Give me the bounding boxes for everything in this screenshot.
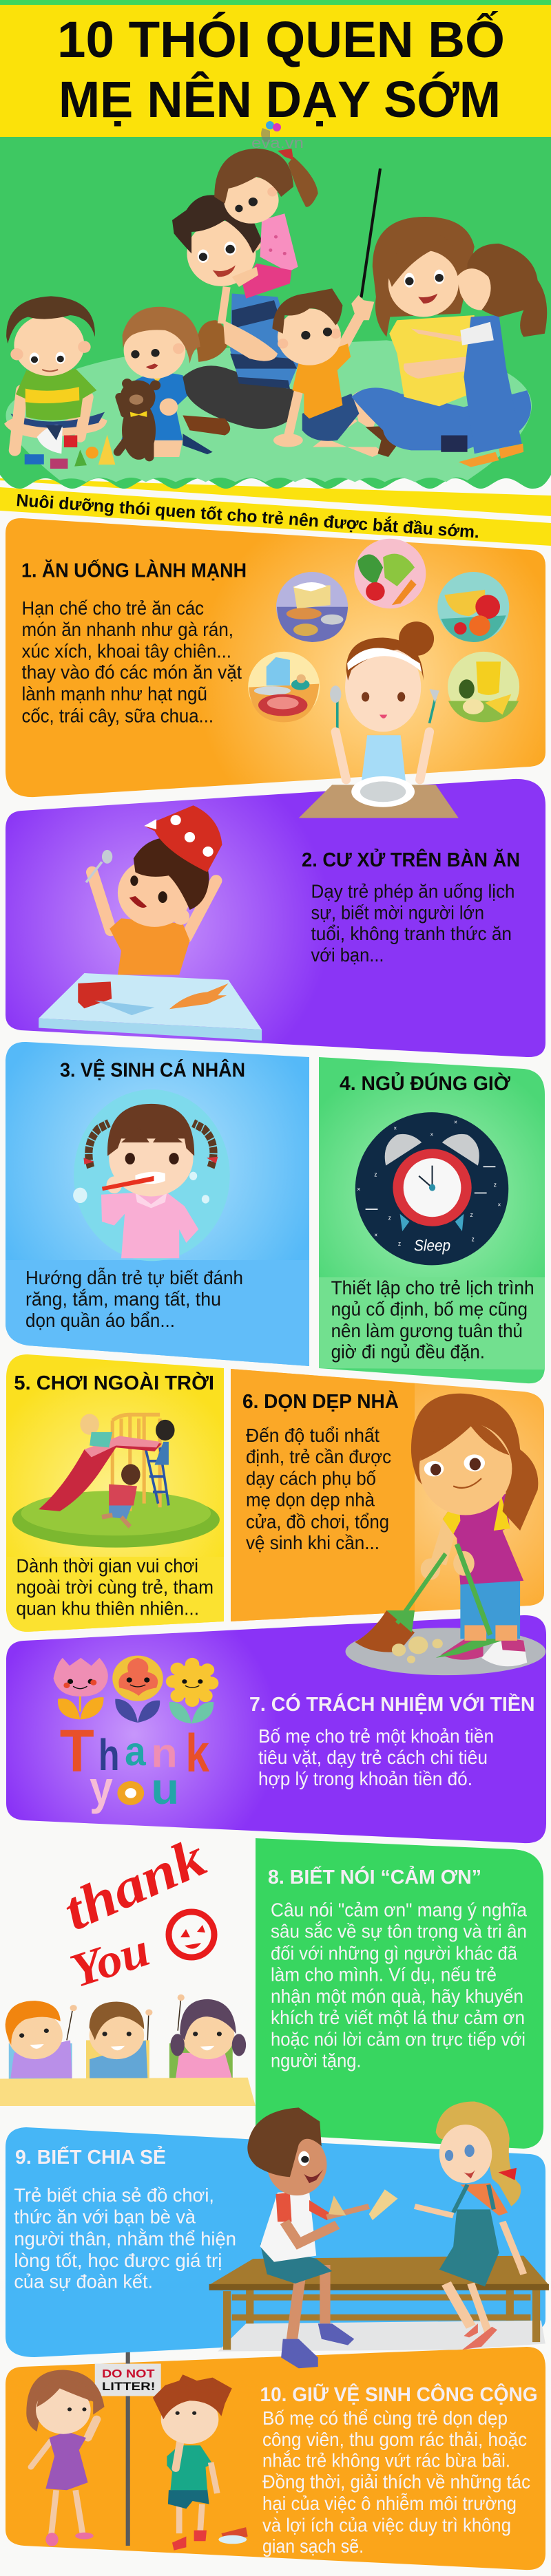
text: healthy eating: thay vào đó các món ăn vặt (22, 661, 242, 683)
panel 8: saying thank you (0, 1827, 543, 2149)
illustration: flowers and thank you letters: k (185, 1723, 209, 1783)
text: table manners: Dạy trẻ phép ăn uống lịch (311, 881, 515, 902)
toy blocks (25, 435, 115, 469)
illustration: flowers and thank you letters: T (60, 1718, 94, 1785)
text: saying thank you: khích trẻ viết một lá thư cảm ơn (271, 2007, 525, 2028)
panel 10: public hygiene (6, 2341, 545, 2570)
boy with orange shirt (272, 288, 401, 457)
text: saying thank you: hoặc nói lời cảm ơn trực tiếp với (271, 2028, 526, 2050)
illustration: girl brushing teeth (73, 1089, 230, 1261)
panel 7: responsibility with money (6, 1615, 546, 1843)
sandwiches (329, 2189, 398, 2220)
subtitle band: Nuôi dưỡng thói quen tốt cho trẻ nên được bắt đầu sớm. (16, 489, 480, 542)
heading: personal hygiene: 3. VỆ SINH CÁ NHÂN (60, 1058, 245, 1082)
illustration: flowers and thank you letters: u (151, 1764, 179, 1813)
text: sharing: người thân, nhằm thể hiện (14, 2228, 236, 2249)
heading: public hygiene: 10. GIỮ VỆ SINH CÔNG CỘNG (260, 2383, 537, 2406)
text: saying thank you: nhận một món quà, hãy khuyến (271, 1986, 523, 2007)
heading: sleep on time: 4. NGỦ ĐÚNG GIỜ (340, 1072, 510, 1095)
text: cleaning the house: cửa, đồ chơi, tổng (246, 1511, 389, 1533)
text: saying thank you: sâu sắc về sự tôn trọng và tri ân (271, 1921, 527, 1942)
heading: cleaning the house: 6. DỌN DẸP NHÀ (242, 1390, 399, 1413)
text: outdoor play (17, 1555, 214, 1619)
text: cleaning the house: định, trẻ cần được (246, 1446, 391, 1467)
girl kissing mother (457, 244, 547, 467)
text: sharing: của sự đoàn kết. (14, 2271, 153, 2292)
text: table manners: tuổi, không tranh thức ăn (311, 923, 512, 944)
girl in purple dress (26, 2370, 105, 2546)
text: cleaning the house: mẹ dọn dẹp nhà (246, 1489, 375, 1511)
panel 1: healthy eating (6, 518, 545, 818)
text: responsibility with money (258, 1725, 494, 1789)
illustration: red thank you lettering: You (64, 1923, 156, 1998)
text: healthy eating: Hạn chế cho trẻ ăn các (22, 597, 204, 619)
text: responsibility with money: Bố mẹ cho trẻ một khoản tiền (258, 1725, 494, 1747)
teddy bear (118, 379, 160, 460)
text: cleaning the house: Đến độ tuổi nhất (246, 1425, 380, 1446)
illustration: flowers and thank you letters: h (98, 1730, 119, 1780)
panel 9: sharing (6, 2101, 549, 2368)
panel 3: personal hygiene (6, 1042, 309, 1366)
illustration: alarm clock: × (454, 1118, 457, 1126)
text: table manners: với bạn... (311, 944, 384, 966)
text: public hygiene: và lợi ích của việc duy trì không (262, 2514, 511, 2535)
illustration: playground with kids (12, 1414, 220, 1548)
text: sharing: thức ăn với bạn bè và (14, 2206, 196, 2227)
text: sleep on time: ngủ cố định, bố mẹ cũng (331, 1298, 528, 1319)
text: sleep on time: nên làm gương tuân thủ (331, 1320, 523, 1341)
text: public hygiene: Đồng thời, giải thích về những tác (262, 2471, 530, 2493)
illustration: red thank you lettering: thank (55, 1827, 215, 1942)
panel 2: table manners (6, 779, 545, 1057)
girl on father's shoulders (214, 149, 318, 299)
text: cleaning the house: vệ sinh khi cần... (246, 1532, 380, 1553)
title banner (0, 0, 551, 138)
text: sharing (14, 2184, 236, 2292)
girl (415, 2101, 523, 2350)
illustration: alarm clock: z (374, 1171, 377, 1178)
illustration: alarm clock: × (430, 1131, 433, 1138)
text: outdoor play: quan khu thiên nhiên... (17, 1597, 199, 1619)
illustration: alarm clock: z (388, 1214, 391, 1222)
illustration: flowers and thank you letters (54, 1656, 218, 1814)
father (172, 195, 299, 436)
illustration: girl sweeping (346, 1394, 545, 1675)
illustration: three children at a desk (0, 1994, 256, 2106)
eva.vn logo: eva.vn (251, 134, 304, 151)
sign: do not litter (95, 2364, 161, 2396)
illustration: alarm clock: Sleep (414, 1237, 450, 1255)
illustration: alarm clock: z (472, 1235, 475, 1243)
text: saying thank you: Câu nói "cảm ơn" mang ý nghĩa (271, 1899, 528, 1920)
text: public hygiene: công viên, thu gom rác thải, hoặc (262, 2429, 527, 2450)
text: saying thank you (271, 1899, 528, 2072)
text: sleep on time (331, 1277, 534, 1363)
boy (247, 2107, 369, 2368)
text: healthy eating (22, 597, 242, 726)
illustration: alarm clock: z (398, 1239, 401, 1247)
text: sleep on time: giờ đi ngủ đều đặn. (331, 1341, 485, 1363)
text: healthy eating: lành mạnh như hạt ngũ (22, 683, 207, 705)
illustration: flowers and thank you letters: y (90, 1762, 113, 1814)
illustration: alarm clock: × (374, 1231, 377, 1239)
text: public hygiene: gian sạch sẽ. (262, 2535, 364, 2557)
text: sharing: Trẻ biết chia sẻ đồ chơi, (14, 2184, 214, 2206)
text: saying thank you: đối với những gì người khác đã (271, 1942, 518, 1963)
text: table manners (311, 881, 515, 966)
heading: sharing: 9. BIẾT CHIA SẺ (15, 2145, 166, 2169)
heading: table manners: 2. CƯ XỬ TRÊN BÀN ĂN (302, 848, 520, 871)
text: personal hygiene: Hướng dẫn trẻ tự biết đánh (25, 1267, 243, 1288)
panel 5: outdoor play (6, 1354, 224, 1632)
text: outdoor play: ngoài trời cùng trẻ, tham (17, 1576, 214, 1597)
illustration: alarm clock (355, 1112, 508, 1265)
text: responsibility with money: hợp lý trong khoản tiền đó. (258, 1768, 472, 1789)
title banner: MẸ NÊN DẠY SỚM (59, 71, 501, 128)
text: public hygiene: hại của việc ô nhiễm môi trường (262, 2493, 517, 2514)
text: public hygiene: nhắc trẻ không vứt rác bừa bãi. (262, 2450, 510, 2471)
text: cleaning the house (246, 1425, 391, 1553)
panel 6: cleaning the house (231, 1369, 545, 1675)
panel 4: sleep on time (319, 1057, 545, 1383)
black stick (361, 169, 380, 297)
text: public hygiene (262, 2407, 530, 2557)
illustration: alarm clock: z (470, 1211, 473, 1218)
illustration: flowers and thank you letters: n (151, 1730, 178, 1776)
illustration: children and do not litter sign (26, 2341, 248, 2551)
hero illustration: family on green background (0, 121, 551, 489)
illustration: alarm clock: × (393, 1125, 397, 1132)
heading: saying thank you: 8. BIẾT NÓI “CẢM ƠN” (268, 1865, 481, 1888)
text: public hygiene: Bố mẹ có thể cùng trẻ dọn dẹp (262, 2407, 508, 2429)
heading: healthy eating: 1. ĂN UỐNG LÀNH MẠNH (21, 559, 247, 582)
text: table manners: sự, biết mời người lớn (311, 902, 484, 923)
sign: do not litter: DO NOT (102, 2367, 154, 2380)
text: cleaning the house: dạy cách phụ bố (246, 1468, 376, 1489)
illustration: alarm clock: × (497, 1201, 501, 1209)
heading: responsibility with money: 7. CÓ TRÁCH NHIỆM VỚI TIỀN (249, 1692, 534, 1716)
heading: outdoor play: 5. CHƠI NGOÀI TRỜI (14, 1371, 214, 1394)
illustration: alarm clock: × (357, 1186, 360, 1193)
text: personal hygiene: răng, tắm, mang tất, thu (25, 1288, 221, 1310)
text: saying thank you: người tặng. (271, 2050, 361, 2072)
text: healthy eating: xúc xích, khoai tây chiên... (22, 641, 231, 662)
title banner: 10 THÓI QUEN BỐ (57, 11, 505, 68)
illustration: two children sharing on a bench (209, 2101, 549, 2368)
text: sleep on time: Thiết lập cho trẻ lịch trình (331, 1277, 534, 1298)
mother (351, 217, 531, 452)
boy in green shirt (153, 2374, 248, 2551)
eva.vn logo (251, 121, 304, 151)
text: personal hygiene (25, 1267, 243, 1331)
text: outdoor play: Dành thời gian vui chơi (17, 1555, 198, 1576)
text: saying thank you: làm cho mình. Ví dụ, nếu trẻ (271, 1964, 497, 1986)
subtitle band (0, 478, 551, 546)
text: sharing: lòng tốt, học được giá trị (14, 2250, 222, 2271)
illustration: alarm clock: z (494, 1181, 497, 1189)
text: healthy eating: cốc, trái cây, sữa chua... (22, 705, 214, 726)
text: healthy eating: món ăn nhanh như gà rán, (22, 619, 233, 640)
text: responsibility with money: tiêu vặt, dạy trẻ cách chi tiêu (258, 1747, 488, 1768)
girl with blue dress and teddy bear (118, 307, 227, 460)
illustration: red thank you lettering (55, 1827, 215, 1998)
text: personal hygiene: dọn quần áo bẩn... (25, 1310, 175, 1331)
illustration: food circles and girl at table (248, 539, 519, 818)
illustration: boy with bowl on head (39, 805, 262, 1041)
illustration: flowers and thank you letters: a (125, 1729, 147, 1774)
boy with green shirt (4, 296, 107, 454)
sign: do not litter: LITTER! (102, 2379, 156, 2393)
